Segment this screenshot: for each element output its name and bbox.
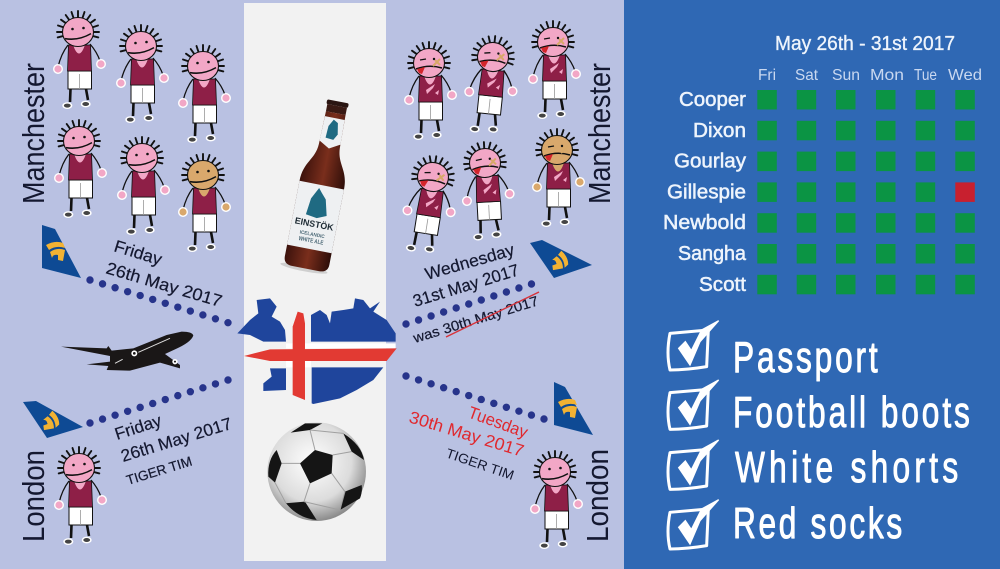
- availability grid: [757, 90, 975, 294]
- route: return Manchester: [406, 280, 544, 324]
- player names: Sangha: [678, 243, 747, 265]
- player: Tiger Tim, left: [55, 447, 106, 545]
- checklist items: White shorts: [735, 443, 958, 492]
- date: Wednesday return to Manchester: Wednesday: [423, 240, 517, 284]
- checklist items: Red socks: [733, 499, 902, 548]
- player: Tiger Tim, right: [531, 451, 582, 549]
- date: Tuesday return to London: [407, 403, 531, 483]
- schedule and checklist panel: [624, 0, 1000, 569]
- day headers: Sat: [795, 67, 819, 84]
- date: Tuesday return to London: TIGER TIM: [444, 446, 516, 483]
- day headers: Mon: [870, 67, 904, 84]
- centre column: [244, 3, 386, 561]
- player names: Cooper: [679, 89, 746, 111]
- date: Wednesday return to Manchester: was 30th May 2017: [410, 292, 540, 346]
- player names: Gillespie: [667, 181, 746, 203]
- Manchester players, injured: [397, 21, 584, 257]
- date: Tuesday return to London: Tuesday: [466, 403, 531, 442]
- icon: beer bottle: EINSTÖK: [294, 215, 335, 233]
- date: Friday from Manchester: Friday: [112, 237, 165, 269]
- route: outbound Manchester: [90, 280, 228, 323]
- date: Friday from London: Friday: [112, 411, 164, 444]
- checkbox icons: [668, 321, 719, 549]
- tail fin: Manchester return: [530, 240, 592, 278]
- player names: Gourlay: [674, 151, 746, 173]
- label: London right: London: [580, 449, 615, 542]
- icon: airplane: [61, 332, 193, 371]
- day headers: Tue: [914, 67, 937, 84]
- player names: Scott: [699, 274, 746, 296]
- checklist items: [733, 333, 970, 548]
- date: Friday from London: 26th May 2017: [119, 414, 234, 466]
- label: London left: London: [16, 450, 51, 542]
- date: Friday from Manchester: 26th May 2017: [104, 259, 224, 311]
- player names: Dixon: [693, 120, 746, 142]
- date: Tuesday return to London: 30th May 2017: [407, 408, 526, 461]
- Manchester players, left: [54, 11, 230, 252]
- label: Manchester right: Manchester: [582, 63, 617, 204]
- player names: [663, 89, 747, 296]
- date: Friday from London: [112, 411, 234, 488]
- date: Wednesday return to Manchester: [410, 240, 540, 346]
- date: Friday from London: TIGER TIM: [124, 454, 194, 488]
- date: Friday from Manchester: [104, 237, 224, 311]
- route: return London: [406, 376, 544, 419]
- day headers: [758, 67, 982, 84]
- tail fin: London return: [554, 382, 593, 435]
- tail fin: Manchester outbound: [42, 225, 81, 278]
- day headers: Wed: [948, 67, 982, 84]
- checklist items: Passport: [733, 333, 878, 382]
- icon: beer bottle: [280, 96, 360, 276]
- label: Manchester left: Manchester: [16, 63, 51, 204]
- player names: Newbold: [663, 212, 746, 234]
- day headers: Fri: [758, 67, 776, 84]
- heading: schedule: May 26th - 31st 2017: [775, 33, 955, 55]
- route: outbound London: [90, 380, 228, 423]
- icon: beer bottle: ICELANDIC: [299, 229, 325, 240]
- date: Wednesday return to Manchester: 31st May 2017: [411, 260, 521, 311]
- tail fin: London outbound: [23, 401, 83, 438]
- background panel: [0, 0, 624, 569]
- icon: Iceland flag map: [237, 298, 397, 404]
- checklist items: Football boots: [733, 388, 970, 437]
- icon: football: [267, 422, 366, 521]
- day headers: Sun: [832, 67, 860, 84]
- icon: beer bottle: WHITE ALE: [298, 236, 324, 247]
